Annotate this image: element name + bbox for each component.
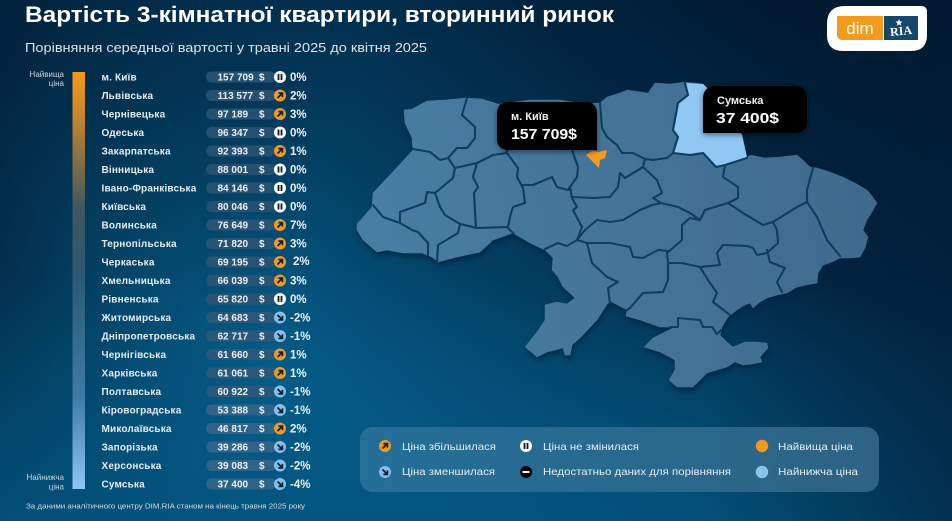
row: Житомирська	[100, 312, 310, 324]
row: Чернігівська	[102, 348, 307, 362]
row: Київська: 80 046	[218, 202, 249, 213]
callout: Сумська: 37 400$	[716, 110, 780, 127]
row: Запорізька: -2%	[290, 442, 310, 454]
row: Івано-Франківська: 84 146	[218, 184, 249, 194]
legend: price increased	[379, 440, 496, 453]
row: Рівненська: 65 820	[218, 294, 249, 306]
legend: highest price: Найвища ціна	[778, 441, 853, 453]
row: Херсонська: Херсонська	[102, 461, 162, 472]
logo: dim.ria: RIA	[889, 23, 913, 39]
row: Одеська: 0%	[290, 128, 307, 140]
callout: м. Київ	[497, 102, 597, 150]
row: Кіровоградська: 53 388	[218, 406, 249, 416]
row: Львівська: $	[259, 91, 265, 102]
row: Чернівецька	[102, 108, 307, 121]
row: Чернігівська: 1%	[290, 350, 307, 362]
row: Житомирська: 64 683	[218, 313, 249, 324]
row: Волинська: 76 649	[218, 220, 249, 232]
row: Миколаївська	[102, 422, 307, 436]
row: Запорізька: $	[259, 442, 265, 454]
row: Рівненська: $	[259, 294, 265, 306]
row: Полтавська	[102, 386, 310, 398]
row: Сумська: Сумська	[102, 480, 145, 490]
callout: Сумська	[703, 86, 807, 133]
legend: price decreased: Ціна зменшилася	[402, 466, 495, 478]
row: Чернігівська: 61 660	[218, 350, 249, 361]
callout: м. Київ: м. Київ	[511, 111, 549, 123]
row: Дніпропетровська: -1%	[290, 331, 310, 343]
row: Одеська	[102, 126, 307, 140]
row: Тернопільська: 3%	[290, 238, 307, 250]
row: Закарпатська: Закарпатська	[102, 146, 171, 158]
row: Харківська: $	[259, 368, 265, 380]
row: Хмельницька	[102, 274, 307, 288]
row: Тернопільська: $	[259, 239, 265, 250]
legend panel	[360, 427, 879, 492]
title: Вартість 3-кімнатної квартири, вторинний ринок	[25, 2, 615, 27]
row: м. Київ: $	[259, 72, 265, 84]
legend: highest price	[756, 440, 853, 453]
row: Одеська: 96 347	[218, 128, 249, 139]
row: Миколаївська: 2%	[290, 424, 307, 436]
row: м. Київ: 157 709	[218, 72, 254, 84]
callout: Сумська: Сумська	[717, 95, 764, 107]
row: Полтавська: $	[259, 387, 265, 398]
row: Тернопільська: Тернопільська	[102, 239, 177, 250]
row: Херсонська: $	[259, 461, 265, 472]
map of Ukraine	[357, 82, 877, 387]
row: Миколаївська: $	[259, 424, 265, 435]
oblast: Сумська	[673, 83, 747, 167]
row: Івано-Франківська: Івано-Франківська	[102, 184, 197, 194]
row: Харківська: Харківська	[102, 368, 158, 380]
row: Львівська	[102, 90, 307, 102]
row: Чернігівська: Чернігівська	[102, 350, 166, 361]
row: Рівненська: Рівненська	[102, 294, 159, 306]
row: Вінницька: 88 001	[218, 165, 249, 176]
row: Черкаська: $	[259, 258, 265, 268]
row: Харківська	[102, 367, 307, 380]
row: Закарпатська: $	[259, 146, 265, 158]
legend: price unchanged: Ціна не змінилася	[543, 441, 639, 453]
scale bar: highest to lowest price	[72, 72, 85, 489]
row: Закарпатська: 1%	[290, 146, 307, 158]
logo: dim.ria	[827, 6, 927, 51]
row: Хмельницька: 3%	[290, 276, 307, 288]
row: Кіровоградська: $	[259, 406, 265, 416]
row: Вінницька: 0%	[290, 164, 307, 176]
row: Запорізька: 39 286	[218, 442, 249, 454]
scale label: highest price: ціна	[49, 79, 65, 88]
row: Київська	[102, 200, 307, 214]
row: Дніпропетровська: $	[259, 332, 265, 342]
row: Одеська: $	[259, 128, 265, 139]
row: Чернівецька: 3%	[290, 109, 307, 121]
row: Волинська: Волинська	[102, 220, 157, 232]
row: Івано-Франківська: $	[259, 184, 265, 194]
row: Дніпропетровська: 62 717	[218, 332, 249, 342]
row: Черкаська: 69 195	[218, 258, 249, 268]
row: Чернівецька: $	[259, 110, 265, 120]
row: Київська: $	[259, 202, 265, 213]
row: Житомирська: Житомирська	[100, 313, 171, 324]
row: Волинська	[102, 219, 307, 232]
row: Івано-Франківська: 0%	[290, 183, 307, 195]
row: Черкаська	[102, 256, 310, 268]
row: Рівненська: 0%	[290, 294, 307, 306]
row: Сумська: $	[259, 480, 265, 490]
row: Львівська: 113 577	[218, 91, 254, 102]
row: Івано-Франківська	[102, 182, 307, 195]
row: Одеська: Одеська	[102, 128, 145, 139]
row: Закарпатська: 92 393	[218, 146, 249, 158]
row: м. Київ: м. Київ	[102, 72, 137, 84]
row: Сумська: -4%	[290, 479, 310, 491]
row: Чернігівська: $	[259, 350, 265, 361]
row: Вінницька: $	[259, 165, 265, 176]
row: Харківська: 61 061	[218, 368, 249, 380]
legend: not enough data: Недостатньо даних для порівняння	[543, 466, 731, 478]
callout: м. Київ: 157 709$	[511, 126, 578, 143]
row: Кіровоградська: Кіровоградська	[102, 406, 182, 416]
legend: price unchanged	[520, 440, 639, 453]
row: Запорізька: Запорізька	[102, 442, 158, 454]
row: Житомирська: -2%	[290, 312, 310, 324]
row: Миколаївська: Миколаївська	[102, 424, 172, 435]
row: Дніпропетровська	[102, 330, 310, 343]
subtitle: Порівняння середньої вартості у травні 2025 до квітня 2025	[25, 40, 427, 55]
oblast: м. Київ	[586, 150, 607, 168]
row: Кіровоградська	[102, 404, 310, 417]
map base: country outline	[357, 82, 877, 387]
row: Житомирська: $	[259, 313, 265, 324]
row: Харківська: 1%	[290, 368, 307, 380]
row: Хмельницька: $	[259, 276, 265, 287]
row: Миколаївська: 46 817	[218, 424, 249, 435]
row: Київська: 0%	[290, 202, 307, 214]
row: Херсонська: 39 083	[218, 461, 249, 472]
oblast borders	[373, 83, 840, 334]
scale label: highest price: Найвища	[30, 70, 64, 79]
row: Чернівецька: Чернівецька	[102, 110, 166, 120]
row: Херсонська: -2%	[290, 460, 310, 472]
row: Вінницька: Вінницька	[102, 165, 154, 176]
row: Сумська: 37 400	[218, 480, 249, 490]
row: Полтавська: -1%	[290, 386, 310, 398]
row: Тернопільська: 71 820	[218, 239, 249, 250]
row: Волинська: $	[259, 220, 265, 232]
scale label: lowest price: ціна	[49, 482, 65, 492]
source note: За даними аналітичного центру DIM.RIA станом на кінець травня 2025 року	[26, 502, 305, 510]
row: Тернопільська	[102, 238, 307, 250]
row: Хмельницька: Хмельницька	[102, 276, 171, 287]
row: Черкаська: 2%	[293, 256, 310, 268]
row: Запорізька	[102, 441, 310, 454]
row: Вінницька	[102, 164, 307, 176]
row: Рівненська	[102, 293, 307, 306]
ranking table	[100, 71, 310, 491]
legend: lowest price: Найнижча ціна	[778, 466, 858, 478]
row: Київська: Київська	[102, 202, 146, 213]
row: Чернівецька: 97 189	[218, 110, 249, 120]
legend: price increased: Ціна збільшилася	[402, 441, 496, 453]
row: Херсонська	[102, 460, 310, 472]
row: Полтавська: 60 922	[218, 387, 249, 398]
logo: dim.ria: dim	[846, 19, 874, 38]
row: Полтавська: Полтавська	[102, 387, 162, 398]
legend: lowest price	[756, 466, 858, 478]
row: Кіровоградська: -1%	[290, 405, 310, 417]
row: м. Київ	[102, 71, 307, 84]
row: Черкаська: Черкаська	[102, 258, 155, 268]
row: Хмельницька: 66 039	[218, 276, 249, 287]
scale label: lowest price: Найнижча	[27, 473, 64, 482]
row: Львівська: 2%	[290, 90, 307, 102]
row: м. Київ: 0%	[290, 72, 307, 84]
row: Дніпропетровська: Дніпропетровська	[102, 332, 195, 342]
row: Закарпатська	[102, 145, 307, 158]
row: Волинська: 7%	[290, 220, 307, 232]
row: Львівська: Львівська	[102, 91, 154, 102]
row: Сумська	[102, 478, 310, 491]
